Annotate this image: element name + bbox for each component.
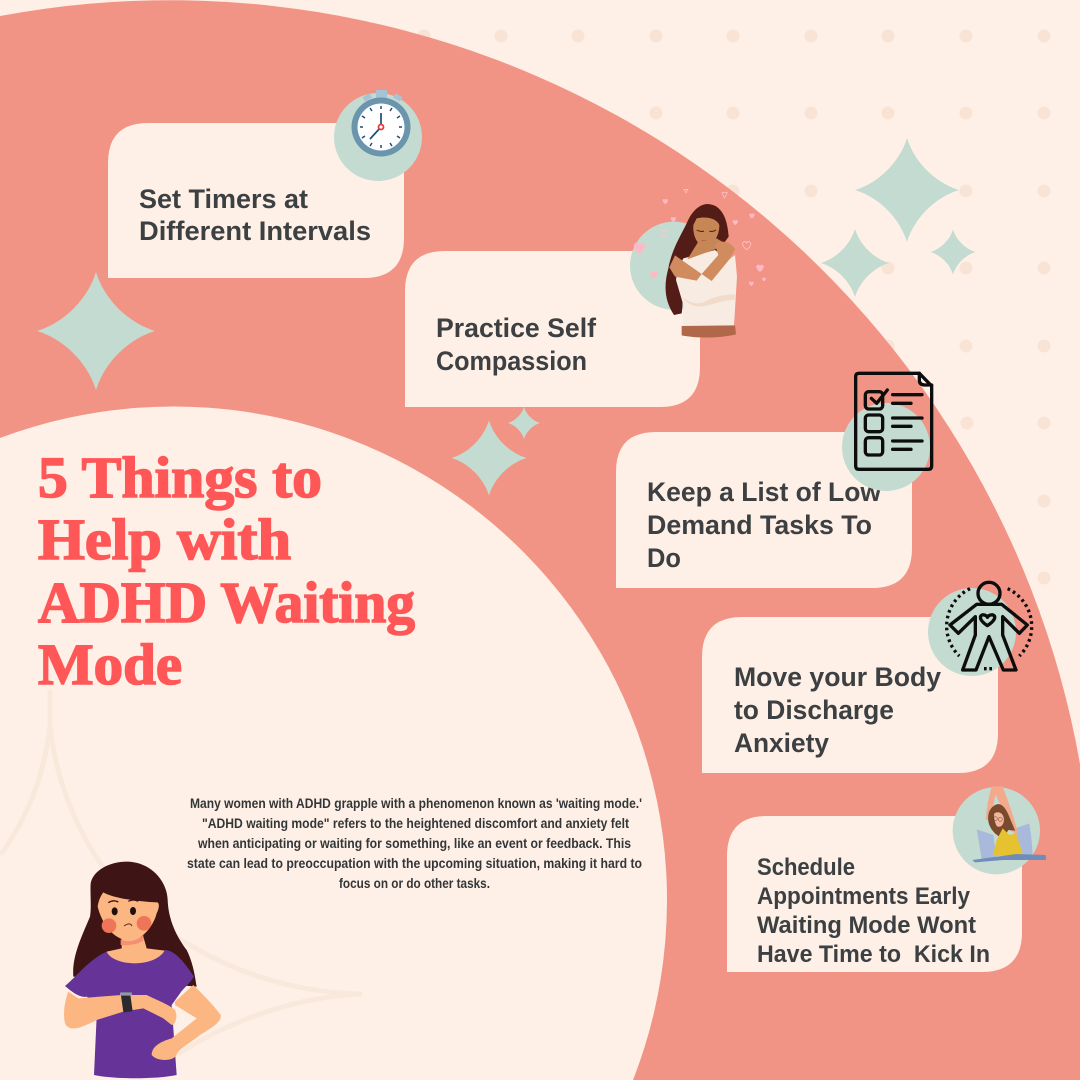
description text: "ADHD waiting mode" refers to the heightened discomfort and anxiety felt bbox=[202, 816, 629, 831]
title: Mode bbox=[38, 632, 182, 697]
card text bbox=[139, 184, 371, 246]
card text: Compassion bbox=[436, 346, 587, 376]
title: 5 Things to bbox=[38, 445, 322, 510]
description text: state can lead to preoccupation with the upcoming situation, making it hard to bbox=[187, 856, 642, 871]
card text bbox=[734, 662, 941, 758]
card text: Appointments Early bbox=[757, 883, 971, 910]
card text: Do bbox=[647, 543, 681, 573]
sparkle: centre small bbox=[508, 407, 540, 439]
panel: cream inner circle bbox=[0, 406, 667, 1080]
card: low demand tasks bbox=[616, 432, 912, 588]
icon: teal circle with stopwatch bbox=[334, 90, 422, 181]
card: schedule appointments bbox=[727, 816, 1022, 972]
card text bbox=[757, 854, 990, 968]
icon: teal circle with body and heart bbox=[928, 582, 1032, 676]
title: ADHD Waiting bbox=[38, 570, 415, 635]
title bbox=[38, 445, 415, 697]
card text: Practice Self bbox=[436, 313, 597, 343]
sparkle: right small bbox=[930, 230, 976, 274]
title: Help with bbox=[38, 507, 291, 572]
card text: to Discharge bbox=[734, 695, 894, 725]
card: move your body bbox=[702, 617, 998, 773]
sparkle: large left bbox=[37, 272, 155, 390]
description text bbox=[187, 796, 642, 891]
illustration: woman checking her watch bbox=[64, 862, 221, 1078]
description text: Many women with ADHD grapple with a phenomenon known as 'waiting mode.' bbox=[190, 796, 642, 811]
icon: teal circle with stretching woman bbox=[953, 786, 1046, 874]
card text bbox=[647, 477, 882, 573]
card: self compassion bbox=[405, 251, 700, 407]
sparkle: right medium bbox=[821, 229, 889, 297]
card text: Waiting Mode Wont bbox=[757, 912, 976, 939]
sparkle: centre large bbox=[452, 420, 526, 496]
card text: Different Intervals bbox=[139, 216, 371, 246]
card text: Schedule bbox=[757, 854, 855, 881]
description text: focus on or do other tasks. bbox=[339, 876, 490, 891]
card text bbox=[436, 313, 597, 376]
card text: Move your Body bbox=[734, 662, 941, 692]
description text: when anticipating or waiting for something, like an event or feedback. This bbox=[197, 836, 631, 851]
card text: Have Time to Kick In bbox=[757, 941, 990, 968]
card text: Set Timers at bbox=[139, 184, 308, 214]
card text: Anxiety bbox=[734, 728, 829, 758]
icon: woman hugging herself bbox=[630, 189, 766, 337]
card: set timers bbox=[108, 90, 422, 278]
card text: Keep a List of Low bbox=[647, 477, 882, 507]
sparkle: top right large bbox=[855, 138, 959, 242]
icon: teal circle with checklist bbox=[842, 373, 932, 491]
card text: Demand Tasks To bbox=[647, 510, 872, 540]
